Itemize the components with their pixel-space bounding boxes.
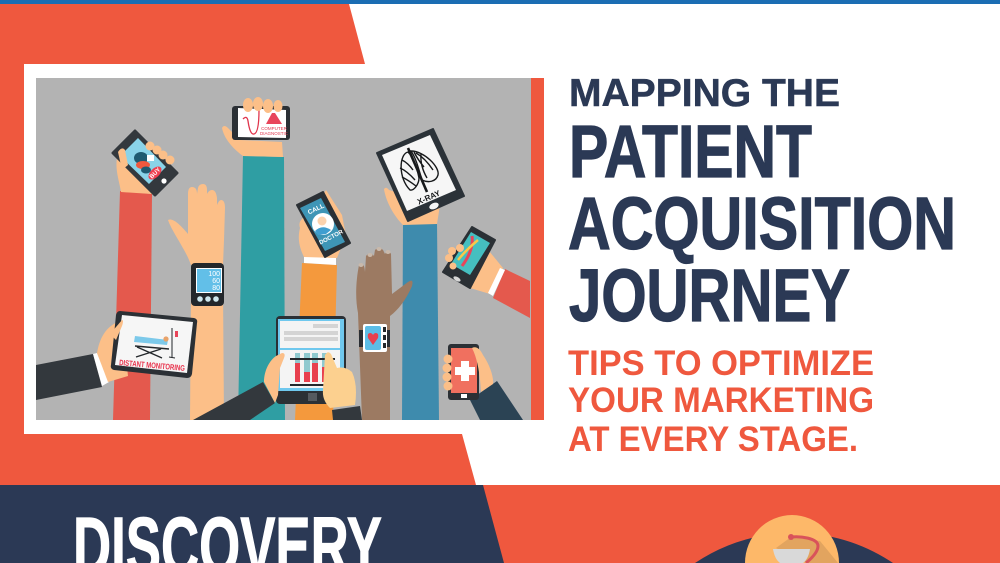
- white image frame: [24, 64, 544, 434]
- phone: computer diagnostic: [222, 97, 290, 157]
- blood pressure watch: 60: [212, 278, 220, 285]
- blood pressure watch: 100: [208, 271, 220, 278]
- phone: medical cross: [442, 344, 523, 420]
- title: mapping the: MAPPING THE: [569, 72, 840, 115]
- blue sleeve arm: [402, 223, 439, 420]
- discovery banner right red: [476, 485, 1000, 563]
- tablet: x-ray: X-RAY: [416, 188, 442, 207]
- tablet: distant monitoring, with suit arm: DISTANT MONITORING: [119, 358, 185, 373]
- phone: call doctor: CALL: [307, 203, 326, 216]
- red background shape: [0, 4, 476, 485]
- subtitle line 3: AT EVERY STAGE.: [568, 419, 858, 459]
- open hand with blood pressure watch: [168, 184, 225, 420]
- phone: call doctor: [297, 190, 350, 258]
- teal sleeve arm: [238, 156, 285, 420]
- tablet: test tubes, with suit arm and hands: [193, 316, 362, 420]
- phone: computer diagnostic: COMPUTER: [261, 126, 288, 131]
- phone: DNA, with sleeve: [443, 227, 530, 318]
- red sleeve arm: [113, 191, 152, 420]
- blood pressure watch: 80: [212, 285, 220, 292]
- illustration panel: hands holding devices: [36, 78, 544, 420]
- title: journey: JOURNEY: [569, 254, 850, 337]
- tablet: x-ray: [377, 129, 464, 225]
- icon: pharmacy bowl and snake: [695, 515, 893, 563]
- test tubes: [290, 353, 335, 386]
- subtitle line 1: TIPS TO OPTIMIZE: [568, 343, 874, 383]
- discovery banner navy: [0, 485, 504, 563]
- title: patient: PATIENT: [569, 110, 812, 193]
- subtitle line 2: YOUR MARKETING: [568, 380, 874, 420]
- phone: computer diagnostic: DIAGNOSTIC: [260, 131, 289, 136]
- orange sleeve arm with cuff: [295, 256, 337, 420]
- top blue bar: [0, 0, 1000, 4]
- phone: call doctor: DOCTOR: [319, 229, 345, 246]
- blood pressure watch: [191, 263, 224, 306]
- brown hand with smart watch: [356, 247, 412, 420]
- smart watch: [359, 324, 390, 352]
- phone: buy: BUY: [149, 167, 162, 180]
- phone: buy: [113, 131, 177, 195]
- ribcage: [400, 148, 438, 192]
- tablet: distant monitoring, with suit arm: [36, 311, 197, 400]
